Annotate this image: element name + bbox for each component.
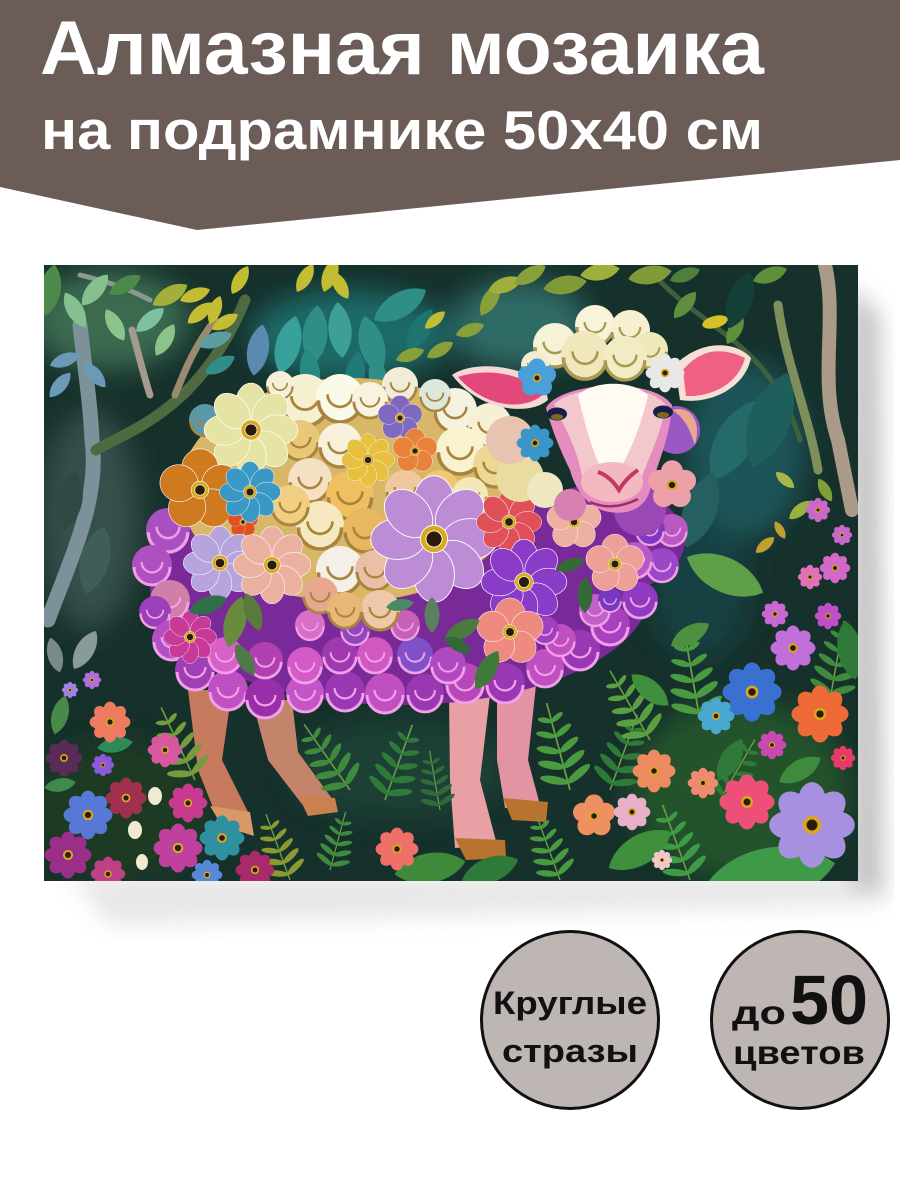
teal-right blades xyxy=(53,268,806,598)
bee xyxy=(702,315,728,329)
eyes xyxy=(547,408,567,420)
badge: round rhinestones xyxy=(482,932,658,1108)
background foliage xyxy=(35,256,806,598)
wool leaves xyxy=(186,554,592,694)
face xyxy=(546,386,672,513)
badge: up to 50 colours xyxy=(712,932,888,1108)
garden plants right xyxy=(530,472,858,881)
sheep body purple wool xyxy=(132,475,688,718)
painting: sheep in a flower garden xyxy=(30,256,868,913)
badge: round rhinestones: Круглые xyxy=(493,985,647,1021)
hooves xyxy=(210,806,254,836)
sheep legs xyxy=(188,685,548,860)
ears xyxy=(452,366,548,409)
sheep body cream wool xyxy=(180,367,520,630)
badge: up to 50 colours: до xyxy=(732,994,786,1031)
wool cap xyxy=(521,305,668,380)
flowers on wool xyxy=(155,383,648,668)
title: Алмазная мозаика xyxy=(40,6,765,91)
subtitle: на подрамнике 50х40 см xyxy=(41,99,763,161)
background colour patches xyxy=(30,270,850,880)
painting background xyxy=(44,265,858,881)
trees xyxy=(48,265,852,620)
canvas shadow xyxy=(70,285,884,925)
header banner xyxy=(0,0,900,230)
head flowers xyxy=(518,358,556,396)
yellow green leaves xyxy=(152,265,787,362)
fern fronds left xyxy=(156,707,455,880)
badge: up to 50 colours: 50 xyxy=(790,961,868,1039)
teal leaves xyxy=(35,263,441,401)
side wool xyxy=(663,406,700,454)
badge: round rhinestones: стразы xyxy=(502,1033,638,1069)
badge: up to 50 colours: цветов xyxy=(733,1034,865,1071)
garden plants left and centre xyxy=(43,626,522,892)
sheep head xyxy=(452,305,751,536)
fern fronds xyxy=(530,621,856,880)
